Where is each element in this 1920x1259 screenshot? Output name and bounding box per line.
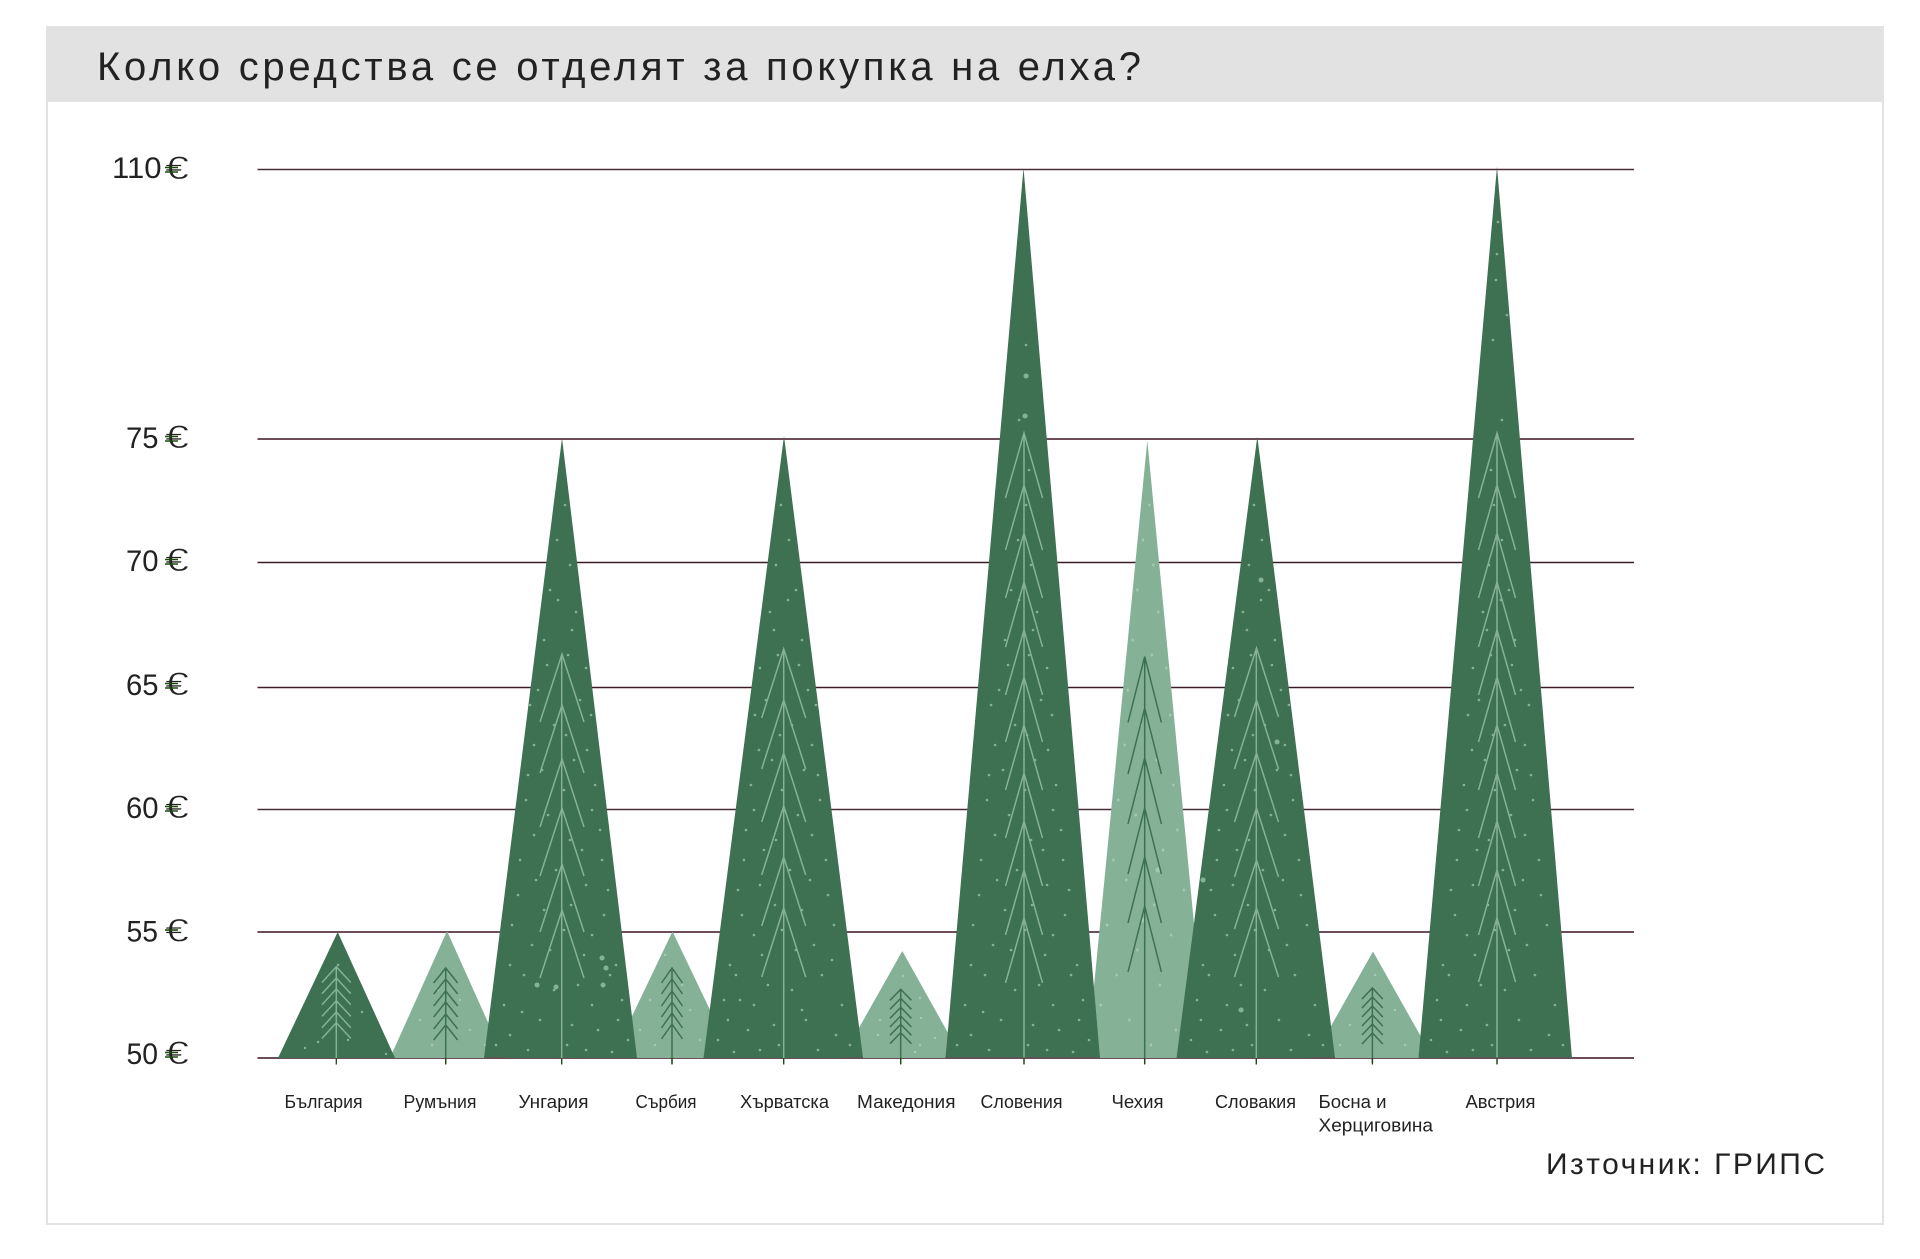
panel: title bar — [46, 26, 1884, 102]
label: 50 euro — [126, 1035, 189, 1071]
label: 75 euro — [126, 419, 189, 455]
tree: България 55 — [278, 932, 395, 1058]
label: 50 euro: 50 — [126, 1038, 158, 1071]
tree: Хърватска 75 — [704, 436, 863, 1064]
chart: price trees — [278, 166, 1572, 1064]
label: 110 euro: € — [165, 150, 189, 186]
tree: Словения 110 — [946, 168, 1100, 1064]
label: 110 euro — [112, 150, 189, 186]
label: Румъния: Румъния — [404, 1092, 476, 1112]
label: 70 euro: 70 — [126, 545, 158, 578]
label: 70 euro — [126, 542, 189, 578]
label: Босна и Херцоговина: Херциговина — [1318, 1116, 1434, 1136]
baseline over tree bases and trunk ticks — [258, 1057, 1634, 1059]
tree: Чехия 75 — [1087, 440, 1207, 1064]
y axis labels — [112, 150, 189, 1071]
gridlines — [258, 170, 1634, 1058]
label: Австрия: Австрия — [1466, 1092, 1536, 1112]
label: 75 euro: 75 — [126, 422, 158, 455]
label: 65 euro: € — [165, 666, 189, 702]
label: Словения: Словения — [980, 1092, 1062, 1112]
label: Сърбия: Сърбия — [636, 1092, 696, 1112]
label: 60 euro — [126, 789, 189, 825]
label: 55 euro: € — [165, 912, 189, 948]
title: Колко средства се отделят за покупка на елха? — [97, 45, 1141, 89]
label: Македония: Македония — [857, 1092, 956, 1112]
tree: Босна и Херцеговина 52 — [1313, 952, 1433, 1063]
tree: Сърбия 55 — [612, 932, 733, 1064]
label: 65 euro — [126, 666, 189, 702]
label: България: България — [284, 1092, 362, 1112]
label: Хърватска: Хърватска — [740, 1092, 830, 1112]
label: 70 euro: € — [165, 542, 189, 578]
source note: Източник: ГРИПС — [1546, 1148, 1825, 1181]
label: Чехия: Чехия — [1112, 1092, 1164, 1112]
label: Босна и Херцоговина — [1318, 1092, 1434, 1136]
label: 60 euro: 60 — [126, 792, 158, 825]
label: 75 euro: € — [165, 419, 189, 455]
label: 50 euro: € — [165, 1035, 189, 1071]
x axis country labels — [284, 1092, 1536, 1136]
label: 110 euro: 110 — [112, 152, 162, 185]
label: 60 euro: € — [165, 789, 189, 825]
label: 55 euro — [126, 912, 189, 948]
label: Унгария: Унгария — [518, 1092, 588, 1112]
label: 65 euro: 65 — [126, 669, 158, 702]
tree: Унгария 75 — [484, 438, 637, 1064]
tree: Словакия 75 — [1176, 436, 1335, 1064]
label: Босна и Херцоговина: Босна и — [1318, 1092, 1386, 1112]
tree: Румъния 55 — [390, 931, 504, 1064]
tree: Австрия 110 — [1418, 166, 1572, 1064]
tree: Македония 52 — [842, 951, 962, 1064]
label: 55 euro: 55 — [126, 916, 158, 948]
label: Словакия: Словакия — [1215, 1092, 1296, 1112]
